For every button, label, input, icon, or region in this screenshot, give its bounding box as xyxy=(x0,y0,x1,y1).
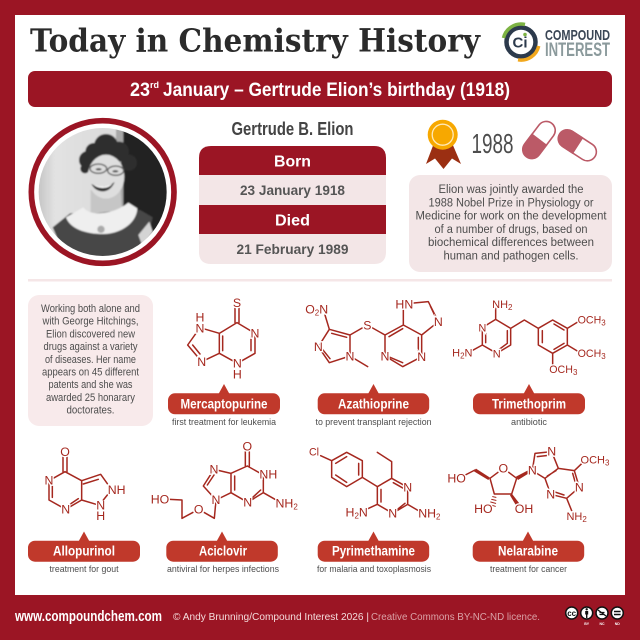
molecule: azathioprine: HN xyxy=(395,297,413,311)
molecule: mercaptopurine: N xyxy=(251,327,259,341)
molecule: aciclovir: N xyxy=(212,493,220,507)
molecule: azathioprine: O xyxy=(305,302,315,316)
panel: career summary: with George Hitchings, xyxy=(42,316,139,328)
footer credit: © Andy Brunning/Compound Interest 2026 | xyxy=(173,611,369,623)
name heading: Gertrude B. Elion xyxy=(232,118,354,139)
label: trimethoprim: antibiotic xyxy=(511,417,547,428)
molecule: nelarabine: NH xyxy=(566,511,582,523)
molecule: trimethoprim: 3 xyxy=(573,368,578,377)
molecule: azathioprine xyxy=(305,297,443,367)
molecule: nelarabine xyxy=(447,445,610,524)
molecule: nelarabine: 2 xyxy=(582,515,587,524)
molecule: aciclovir xyxy=(151,440,298,518)
molecule: nelarabine: HO xyxy=(474,502,493,516)
icon: capsule one xyxy=(519,117,559,163)
molecule: azathioprine: N xyxy=(314,340,323,354)
molecule: allopurinol: N xyxy=(61,503,70,517)
panel: born and died dates: Died xyxy=(275,212,310,230)
label: azathioprine: Azathioprine xyxy=(338,396,409,411)
molecule: aciclovir: N xyxy=(210,462,218,476)
panel: career summary: drugs against a variety xyxy=(44,341,138,353)
portrait photo xyxy=(31,121,174,263)
molecule: pyrimethamine xyxy=(309,447,441,521)
molecule: mercaptopurine: N xyxy=(233,357,242,371)
molecule: nelarabine: N xyxy=(547,445,556,459)
molecule: mercaptopurine: S xyxy=(233,296,241,310)
molecule: trimethoprim: 3 xyxy=(601,319,606,328)
panel: career summary: Elion discovered new xyxy=(46,328,135,340)
date banner xyxy=(28,71,612,107)
label: aciclovir: Aciclovir xyxy=(199,544,248,559)
panel: Nobel prize text: biochemical differences between xyxy=(428,237,594,249)
panel: Nobel prize text: Elion was jointly awarded the xyxy=(438,184,584,196)
year 1988: 1988 xyxy=(472,128,514,159)
panel: born and died dates: 21 February 1989 xyxy=(236,241,349,257)
molecule: aciclovir: NH xyxy=(259,467,277,481)
label: nelarabine: Nelarabine xyxy=(498,544,558,559)
molecule: mercaptopurine: N xyxy=(197,355,206,369)
molecule: pyrimethamine: 2 xyxy=(354,512,359,521)
molecule: aciclovir: N xyxy=(243,496,252,510)
molecule: azathioprine: N xyxy=(381,349,389,363)
label: aciclovir: antiviral for herpes infections xyxy=(167,564,279,575)
molecule: azathioprine: N xyxy=(346,349,354,363)
molecule: nelarabine: N xyxy=(546,488,555,502)
molecule: trimethoprim: N xyxy=(478,323,486,335)
molecule: allopurinol: N xyxy=(45,474,53,488)
label: nelarabine: treatment for cancer xyxy=(490,564,567,575)
molecule: allopurinol: H xyxy=(96,509,105,523)
molecule: mercaptopurine xyxy=(188,296,259,382)
molecule: aciclovir: O xyxy=(243,440,252,454)
panel: career summary: patents and she was xyxy=(48,379,133,391)
molecule: pyrimethamine: Cl xyxy=(309,447,319,459)
molecule: nelarabine: N xyxy=(575,480,584,494)
icons: creative commons badges xyxy=(566,607,623,626)
molecule: trimethoprim: NH xyxy=(492,299,508,311)
molecule: pyrimethamine: N xyxy=(359,506,368,520)
icon: capsule two xyxy=(554,126,600,165)
molecule: nelarabine: O xyxy=(499,462,508,476)
molecule: mercaptopurine: H xyxy=(196,311,204,325)
logo: Compound Interest: COMPOUND xyxy=(545,27,610,44)
date banner: rd xyxy=(150,80,159,90)
molecule: allopurinol: NH xyxy=(108,483,126,497)
molecule: azathioprine: N xyxy=(434,315,443,329)
panel: born and died dates: 23 January 1918 xyxy=(240,182,345,198)
footer website: www.compoundchem.com xyxy=(14,608,162,625)
molecule: trimethoprim: 2 xyxy=(508,303,513,312)
label: trimethoprim: Trimethoprim xyxy=(492,396,566,411)
panel: career summary: awarded 25 honarary xyxy=(46,392,135,404)
molecule: nelarabine: OCH xyxy=(581,454,605,466)
label: allopurinol: Allopurinol xyxy=(53,544,115,559)
panel: career summary xyxy=(28,295,153,426)
label: mercaptopurine: Mercaptopurine xyxy=(180,396,268,411)
logo: Compound Interest xyxy=(504,24,610,61)
molecule: trimethoprim: OCH xyxy=(549,364,573,376)
panel: born and died dates xyxy=(199,146,386,264)
molecule: aciclovir: NH xyxy=(276,496,293,510)
panel: career summary: of diseases. Her name xyxy=(45,354,136,366)
title: Today in Chemistry History xyxy=(30,22,481,60)
date banner: 23 xyxy=(130,80,150,101)
label: pyrimethamine: for malaria and toxoplasmosis xyxy=(317,564,431,575)
label: mercaptopurine: first treatment for leukemia xyxy=(172,417,277,428)
panel: Nobel prize text: 1988 Nobel Prize in Physiology or xyxy=(428,197,594,209)
molecule: nelarabine: OH xyxy=(515,502,533,516)
molecule: azathioprine: N xyxy=(417,350,426,364)
label: azathioprine: to prevent transplant rejection xyxy=(316,417,432,428)
icons: creative commons badges: ND xyxy=(615,622,620,626)
molecule: aciclovir: 2 xyxy=(293,502,298,511)
molecule: mercaptopurine: H xyxy=(233,368,242,382)
molecule: trimethoprim: N xyxy=(493,348,501,360)
molecule: azathioprine: 2 xyxy=(315,308,320,317)
label: pyrimethamine xyxy=(317,532,431,575)
footer licence: Creative Commons BY-NC-ND licence. xyxy=(371,611,540,623)
molecule: pyrimethamine: N xyxy=(388,506,397,520)
label: pyrimethamine: Pyrimethamine xyxy=(332,544,415,559)
panel: born and died dates: Born xyxy=(274,154,311,170)
molecule: nelarabine: N xyxy=(528,464,537,478)
label: allopurinol xyxy=(28,532,140,575)
molecule: aciclovir: O xyxy=(194,502,203,516)
molecule: trimethoprim: OCH xyxy=(578,315,601,327)
molecule: pyrimethamine: 2 xyxy=(436,512,441,521)
label: azathioprine xyxy=(316,384,432,428)
molecule: allopurinol xyxy=(45,445,126,523)
icons: creative commons badges: cc xyxy=(567,609,577,618)
molecule: pyrimethamine: N xyxy=(403,480,412,494)
molecule: trimethoprim: OCH xyxy=(578,348,601,360)
label: allopurinol: treatment for gout xyxy=(50,564,119,575)
panel: career summary: Working both alone and xyxy=(41,303,140,315)
label: aciclovir xyxy=(166,532,279,575)
molecule: pyrimethamine: H xyxy=(346,506,354,520)
panel: career summary: doctorates. xyxy=(66,405,114,417)
panel: Nobel prize text: human and pathogen cells. xyxy=(444,250,578,262)
logo: Compound Interest: Ci xyxy=(512,34,528,52)
logo: Compound Interest: INTEREST xyxy=(545,40,610,61)
panel: Nobel prize text: of a number of drugs, based on xyxy=(434,224,588,236)
molecule: trimethoprim: 2 xyxy=(460,352,465,361)
molecule: trimethoprim: N xyxy=(465,348,473,360)
icons: creative commons badges: BY xyxy=(584,622,590,626)
molecule: allopurinol: N xyxy=(96,499,105,513)
icons: creative commons badges: NC xyxy=(599,622,605,626)
icon: medal xyxy=(426,120,461,169)
molecule: azathioprine: S xyxy=(363,318,371,332)
molecule: mercaptopurine: N xyxy=(196,321,204,335)
molecule: trimethoprim: 3 xyxy=(601,352,606,361)
panel: Nobel prize text: Medicine for work on the development xyxy=(416,211,607,223)
label: trimethoprim xyxy=(473,384,585,428)
molecule: trimethoprim xyxy=(452,299,606,377)
label: mercaptopurine xyxy=(168,384,280,428)
molecule: trimethoprim: H xyxy=(452,348,460,360)
date banner: January – Gertrude Elion’s birthday (1918) xyxy=(163,80,510,101)
molecule: nelarabine: HO xyxy=(447,471,466,485)
molecule: allopurinol: O xyxy=(60,445,70,459)
molecule: azathioprine: N xyxy=(319,302,328,316)
panel: career summary: appears on 45 different xyxy=(42,366,139,378)
panel: Nobel prize text xyxy=(409,175,612,272)
molecule: nelarabine: 3 xyxy=(605,458,610,467)
molecule: pyrimethamine: NH xyxy=(418,506,436,520)
label: nelarabine xyxy=(473,532,584,575)
molecule: aciclovir: HO xyxy=(151,492,169,506)
